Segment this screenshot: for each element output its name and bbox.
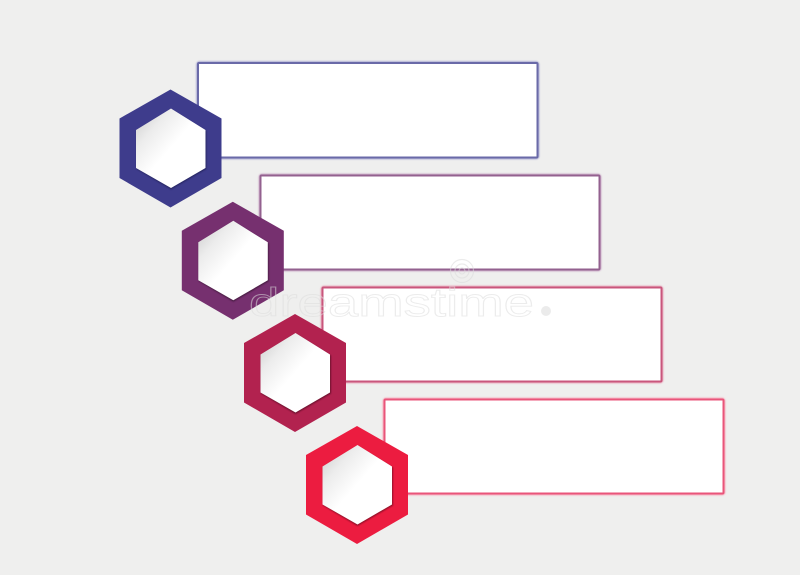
icon: hexagon 3 <box>244 314 346 432</box>
panel: box 2 <box>260 176 600 270</box>
icon: hexagon 2 <box>182 202 284 320</box>
panel: box 4 <box>384 400 724 494</box>
panel: box 1 <box>198 63 538 158</box>
watermark: dreamstime <box>249 281 534 325</box>
watermark <box>249 260 551 325</box>
icon: hexagon 1 <box>120 90 222 208</box>
panel: box 3 <box>322 288 662 382</box>
icon: hexagon 4 <box>306 426 408 544</box>
